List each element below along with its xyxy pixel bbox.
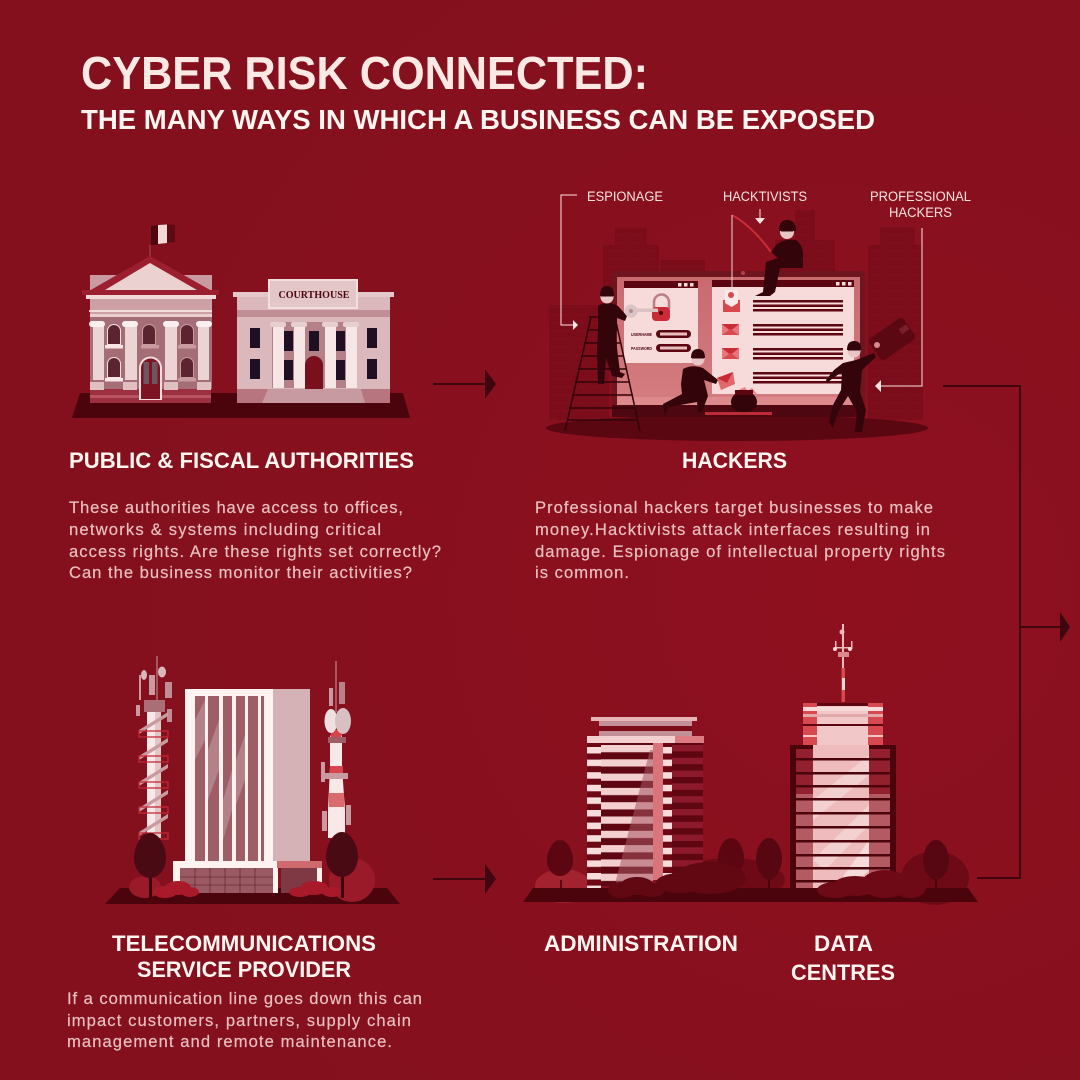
ground platform <box>72 393 410 418</box>
text: telecommunications: management and remote maintenance. <box>67 1032 392 1051</box>
espionage hacker on ladder <box>565 286 658 431</box>
text: telecommunications: impact customers, partners, supply chain <box>67 1011 411 1030</box>
office building <box>173 689 322 893</box>
label: espionage <box>561 189 663 330</box>
flag <box>150 224 175 262</box>
ground <box>105 888 400 904</box>
label: professional hackers <box>870 189 971 392</box>
administration building <box>587 717 704 892</box>
illustration: public and fiscal authorities buildings <box>72 224 410 418</box>
text: public and fiscal authorities: Can the business monitor their activities? <box>69 563 412 582</box>
illustration: administration and data centres <box>523 624 978 905</box>
near bushes and trees <box>608 838 949 898</box>
windows <box>105 324 196 382</box>
text: hackers: damage. Espionage of intellectual property rights <box>535 542 945 561</box>
email icons <box>722 290 740 359</box>
data centre tower <box>790 624 896 888</box>
illustration: hackers attacking a screen <box>546 189 971 441</box>
government building <box>82 256 219 403</box>
screen <box>612 271 865 407</box>
far bushes <box>535 838 969 905</box>
columns <box>93 324 209 380</box>
label: professional hackers: HACKERS <box>889 205 952 220</box>
background city <box>549 210 923 420</box>
heading: public and fiscal authorities: PUBLIC & FISCAL AUTHORITIES <box>69 448 414 473</box>
door <box>139 356 162 400</box>
text: hackers: Professional hackers target businesses to make <box>535 498 933 517</box>
heading: telecommunications service provider <box>112 931 376 982</box>
antenna mast <box>833 624 852 702</box>
heading: telecommunications service provider: TELECOMMUNICATIONS <box>112 931 376 956</box>
heading: data centres: DATA <box>814 931 873 956</box>
ground ellipse <box>546 415 928 441</box>
label: espionage: ESPIONAGE <box>587 189 663 204</box>
professional hacker with card <box>826 316 917 432</box>
bushes and trees <box>129 832 375 902</box>
login panel <box>624 281 698 363</box>
heading: data centres: CENTRES <box>791 960 895 985</box>
connector: merged arrow to the right <box>943 386 1070 878</box>
text: telecommunications: If a communication line goes down this can <box>67 989 422 1008</box>
label: professional hackers: PROFESSIONAL <box>870 189 971 204</box>
key <box>624 304 658 318</box>
text: hackers <box>535 498 945 582</box>
text: public and fiscal authorities: These authorities have access to offices, <box>69 498 403 517</box>
heading: data centres <box>791 931 895 985</box>
label: hacktivists: HACKTIVISTS <box>723 189 807 204</box>
ground <box>523 888 978 902</box>
text: telecommunications <box>67 989 422 1051</box>
kneeling hacker with stolen mail <box>663 349 735 416</box>
text: public and fiscal authorities: networks & systems including critical <box>69 520 381 539</box>
heading: hackers: HACKERS <box>682 448 787 473</box>
courthouse <box>233 279 394 403</box>
text: hackers: money.Hacktivists attack interfaces resulting in <box>535 520 930 539</box>
password field: PASSWORD <box>631 346 653 351</box>
label: hacktivists <box>723 189 807 224</box>
text: hackers: is common. <box>535 563 629 582</box>
bag of envelopes <box>705 387 772 415</box>
email panel <box>712 280 854 394</box>
arrow: authorities to hackers <box>433 369 496 399</box>
right mast <box>321 661 351 838</box>
hacktivist with fishing rod <box>732 215 803 296</box>
arrow: telecom to administration <box>433 864 496 894</box>
illustration: telecommunications provider <box>105 656 400 904</box>
text: public and fiscal authorities: access rights. Are these rights set correctly? <box>69 542 441 561</box>
left mast <box>136 656 172 839</box>
text: public and fiscal authorities <box>69 498 441 582</box>
courthouse sign: COURTHOUSE <box>278 290 350 301</box>
subtitle: THE MANY WAYS IN WHICH A BUSINESS CAN BE EXPOSED <box>81 104 875 135</box>
title: CYBER RISK CONNECTED: <box>81 47 648 99</box>
heading: administration: ADMINISTRATION <box>544 931 738 956</box>
email list <box>753 300 843 384</box>
heading: telecommunications service provider: SERVICE PROVIDER <box>137 957 351 982</box>
username field: USERNAME <box>631 332 652 337</box>
padlock <box>652 295 670 321</box>
